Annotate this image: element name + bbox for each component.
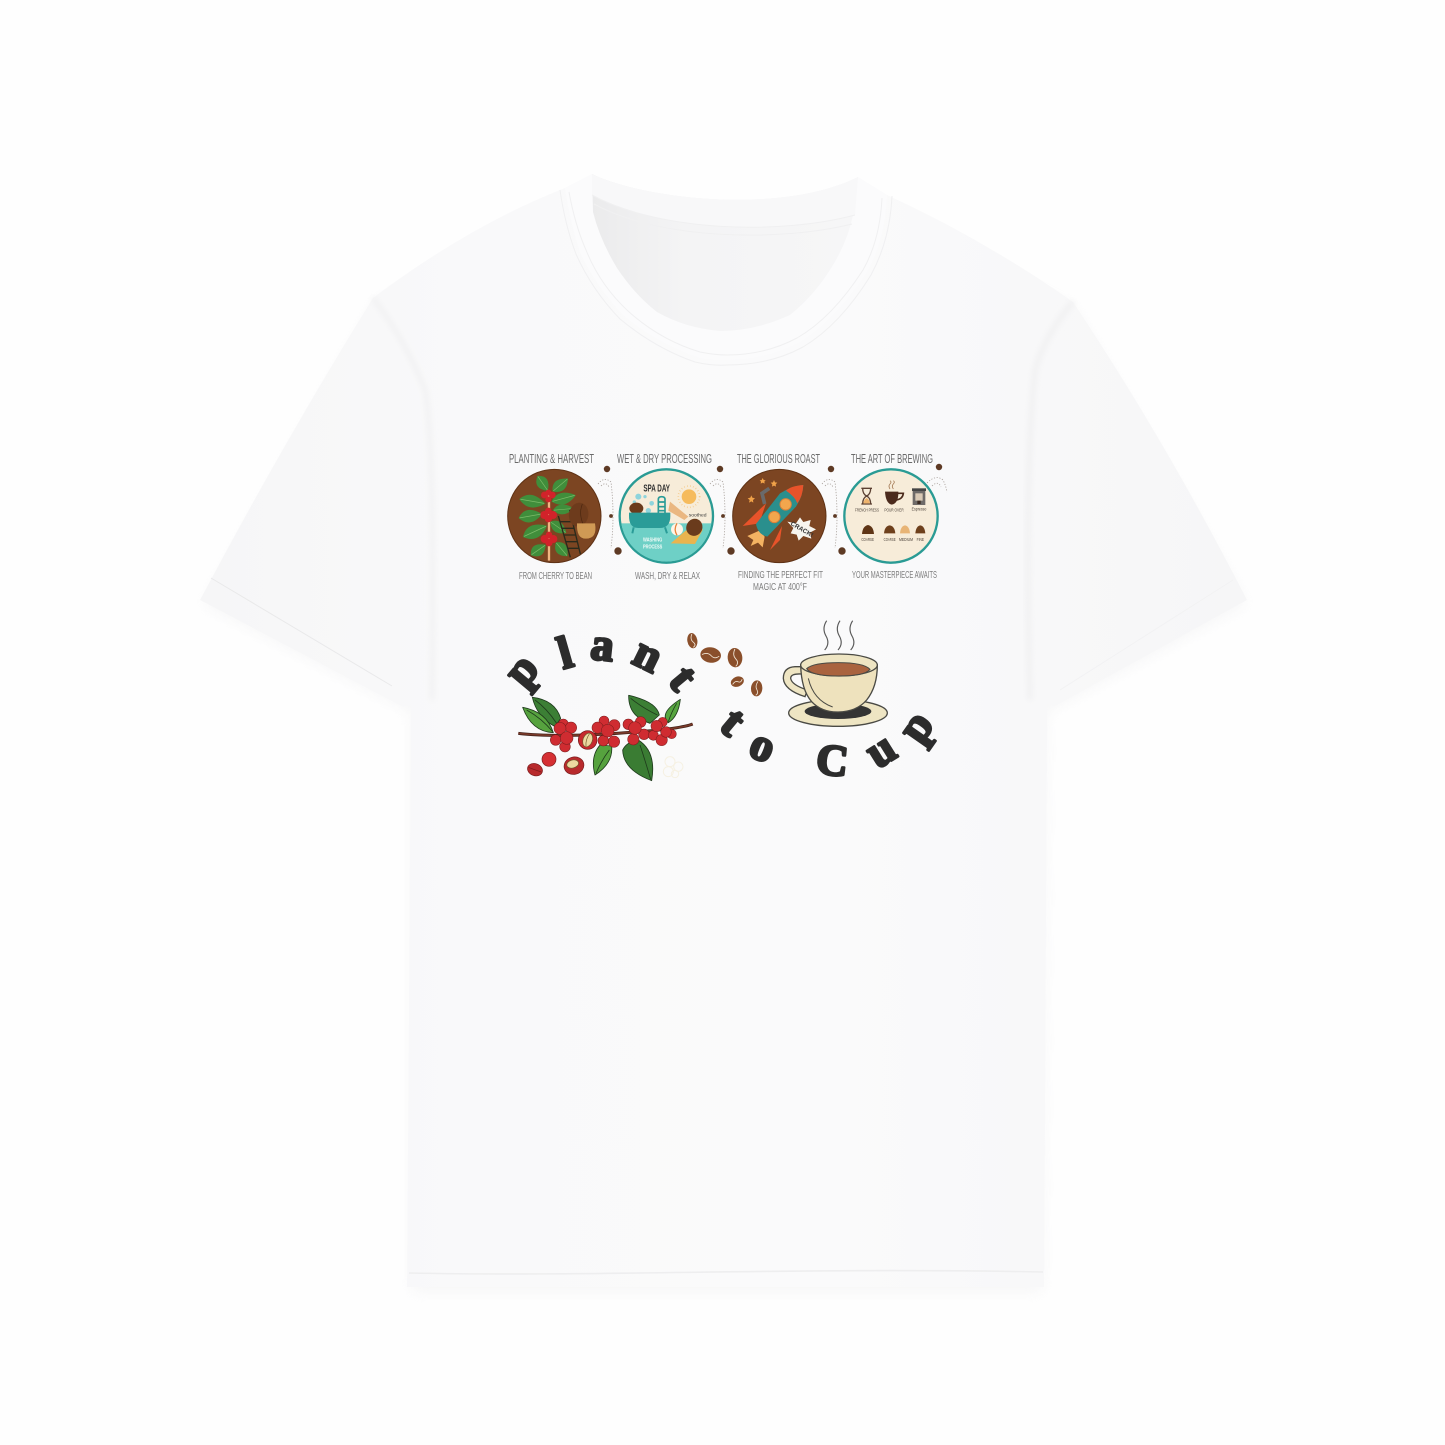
sleeve seams xyxy=(211,298,1233,1274)
pour over cup icon xyxy=(885,481,903,505)
t-shirt xyxy=(200,174,1247,1292)
badge xyxy=(844,469,938,563)
split cherry xyxy=(578,731,597,749)
title: Plant to Cup: u xyxy=(856,721,904,778)
relaxing bean xyxy=(683,516,705,539)
spa day label: SPA DAY xyxy=(643,484,670,495)
title: Plant to Cup: a xyxy=(588,618,617,671)
cup rim xyxy=(801,654,877,676)
connector 3 xyxy=(822,466,846,555)
shirt shadow xyxy=(204,210,1246,1292)
cup body xyxy=(801,665,877,712)
connector 4 xyxy=(927,464,947,492)
step headings: PLANTING & HARVEST xyxy=(509,451,594,466)
pool ladder xyxy=(658,497,665,514)
rocket fins xyxy=(743,503,782,550)
connector 2 xyxy=(710,466,735,555)
loose cherries xyxy=(526,752,586,778)
step headings: THE GLORIOUS ROAST xyxy=(737,451,820,466)
steam xyxy=(824,621,854,650)
grind labels xyxy=(861,537,924,542)
title: Plant to Cup: C xyxy=(814,734,851,787)
leaves xyxy=(523,695,680,781)
saucer xyxy=(789,700,887,726)
step headings: THE ART OF BREWING xyxy=(851,451,933,466)
coffee cup illustration xyxy=(783,621,887,726)
step headings: WET & DRY PROCESSING xyxy=(617,451,712,466)
badge xyxy=(508,469,601,563)
espresso machine icon xyxy=(912,488,926,505)
coffee beans xyxy=(686,632,763,697)
coffee branch illustration xyxy=(518,695,693,781)
crack burst: CRACK! xyxy=(789,520,814,539)
inner back collar band xyxy=(592,174,858,227)
rocket nose xyxy=(786,485,803,503)
towel xyxy=(671,529,703,544)
step captions xyxy=(519,569,937,593)
bubbles xyxy=(633,494,654,513)
panel: wet and dry processing: PROCESS xyxy=(643,545,662,551)
sun xyxy=(678,486,700,507)
bathtub xyxy=(629,513,670,528)
badge xyxy=(733,469,826,563)
step captions: YOUR MASTERPIECE AWAITS xyxy=(852,569,937,581)
step captions: FINDING THE PERFECT FIT xyxy=(738,569,823,581)
branch xyxy=(518,724,693,735)
panel: wet and dry processing xyxy=(618,469,715,563)
handle xyxy=(783,667,807,697)
bean in tub xyxy=(629,503,643,514)
stars xyxy=(748,478,777,503)
title: Plant to Cup: t xyxy=(711,697,756,746)
title: Plant to Cup: l xyxy=(552,626,578,679)
portholes xyxy=(780,499,791,510)
collar stitching xyxy=(560,190,892,365)
brew method labels: FRENCH PRESS xyxy=(855,507,879,512)
grind labels: COARSE xyxy=(884,537,896,542)
water xyxy=(618,523,715,563)
brew method labels: POUR OVER xyxy=(884,507,904,512)
slide xyxy=(668,502,688,520)
connector 1 xyxy=(598,466,622,555)
beach ball xyxy=(671,523,683,535)
grind labels: FINE xyxy=(917,537,924,542)
panel: the glorious roast xyxy=(733,469,826,563)
stem xyxy=(545,493,552,561)
process label: WASHING xyxy=(643,538,663,544)
step captions: MAGIC AT 400°F xyxy=(753,581,807,593)
ladder xyxy=(558,510,580,557)
title: Plant to Cup: p xyxy=(887,701,943,751)
soothed label: soothed xyxy=(689,512,707,518)
collar rib xyxy=(565,174,887,360)
flame xyxy=(747,531,765,547)
hourglass icon xyxy=(861,488,872,504)
grind piles xyxy=(862,525,925,534)
neck band stitching xyxy=(592,195,855,235)
back neck interior xyxy=(592,174,858,331)
grind labels: MEDIUM xyxy=(899,537,913,542)
coffee bean picker xyxy=(567,501,595,539)
title: Plant to Cup: o xyxy=(743,717,783,773)
brew method labels xyxy=(855,507,927,512)
coffee xyxy=(807,663,870,676)
title: Plant to Cup: p xyxy=(493,643,548,696)
step captions: WASH, DRY & RELAX xyxy=(635,570,700,582)
step headings xyxy=(509,451,933,466)
grind labels: COARSE xyxy=(861,537,874,542)
badge background xyxy=(620,469,713,563)
faint paw mark xyxy=(663,757,683,778)
title: Plant to Cup: n xyxy=(626,626,671,683)
shirt body and sleeves xyxy=(200,174,1247,1287)
cherries xyxy=(550,716,676,752)
brew method labels: Espresso xyxy=(912,507,927,512)
cherries xyxy=(540,490,557,546)
panel: the art of brewing xyxy=(844,469,938,563)
saucer shadow xyxy=(805,704,871,719)
step captions: FROM CHERRY TO BEAN xyxy=(519,570,592,582)
leaves xyxy=(518,473,577,560)
exhaust hook xyxy=(762,488,769,504)
rocket body xyxy=(756,485,803,537)
title: Plant to Cup: t xyxy=(659,655,709,700)
cup highlight xyxy=(808,678,833,707)
title: Plant to Cup xyxy=(493,618,943,787)
panel: planting and harvest xyxy=(508,469,601,563)
